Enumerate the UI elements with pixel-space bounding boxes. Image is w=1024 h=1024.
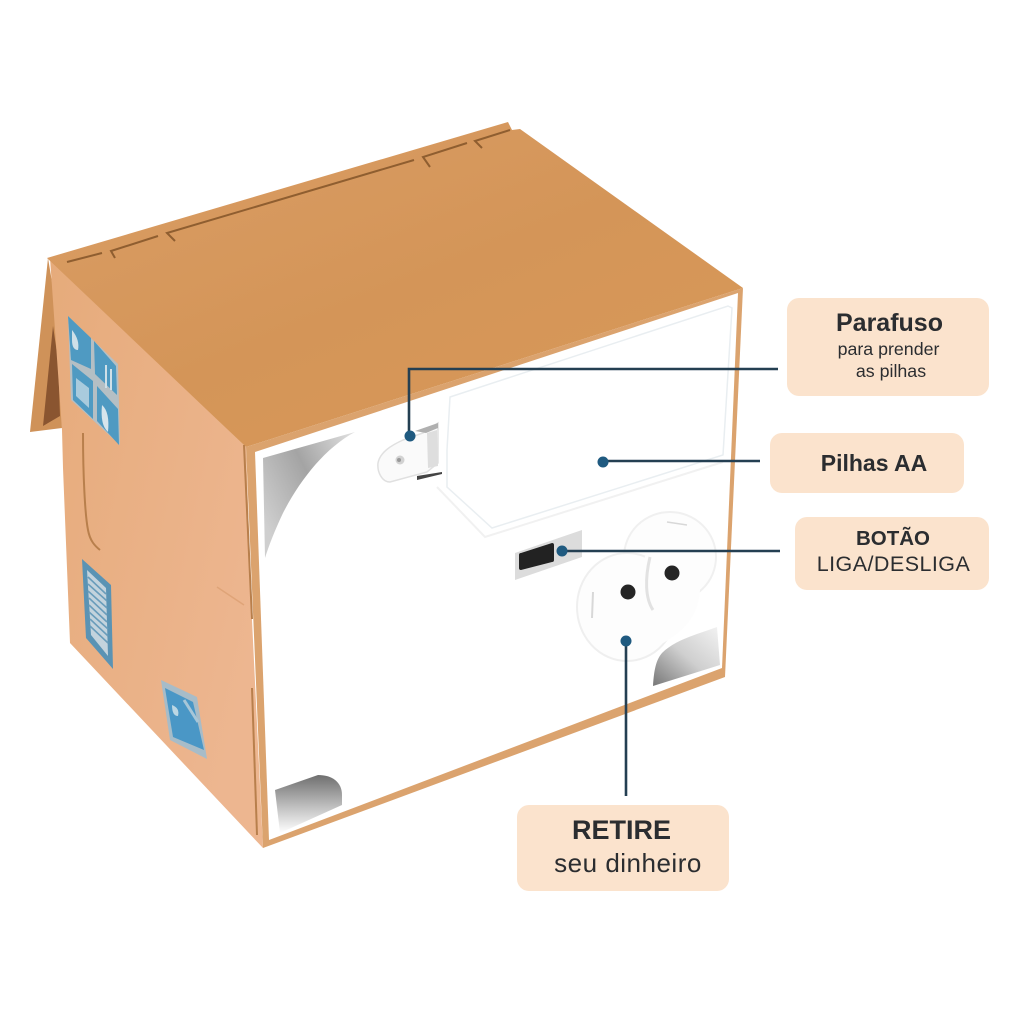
- label: Parafuso: Parafuso: [836, 309, 943, 337]
- label: Pilhas AA: [770, 433, 964, 493]
- power switch: [515, 530, 582, 580]
- roof back flap: [30, 258, 62, 432]
- label: botão liga/desliga: LIGA/DESLIGA: [817, 552, 970, 576]
- box left side: [50, 258, 263, 848]
- blue symbols grid: [68, 316, 120, 445]
- callout lines: [409, 369, 780, 796]
- box roof: [47, 122, 743, 447]
- white back panel: [255, 293, 738, 840]
- bottom left foot opening: [275, 775, 342, 833]
- coin knob: [577, 512, 716, 661]
- left inner cavity shading: [263, 432, 355, 558]
- label: botão liga/desliga: BOTÃO: [856, 527, 930, 550]
- label: botão liga/desliga: [795, 517, 989, 590]
- white back panel frame: [246, 288, 743, 848]
- label: Pilhas AA: Pilhas AA: [821, 450, 927, 476]
- barcode label: [82, 559, 113, 669]
- callout dots: [404, 430, 632, 646]
- cardboard box product: [30, 122, 743, 848]
- label: retire seu dinheiro: RETIRE: [572, 815, 671, 845]
- side edge slots: [83, 433, 257, 835]
- blue sticker: [161, 680, 207, 759]
- roof slots: [67, 130, 510, 262]
- bottom right foot opening: [653, 627, 720, 686]
- battery cover: [437, 306, 732, 537]
- label: retire seu dinheiro: seu dinheiro: [554, 848, 702, 878]
- label: Parafuso: para prender: [838, 339, 939, 359]
- label: Parafuso: as pilhas: [856, 361, 926, 381]
- label: Parafuso: [787, 298, 989, 396]
- screw tab: [378, 423, 442, 482]
- label: retire seu dinheiro: [517, 805, 729, 891]
